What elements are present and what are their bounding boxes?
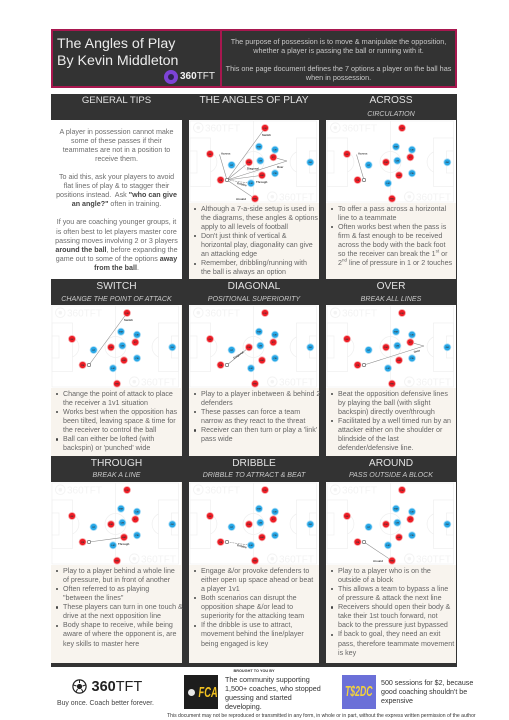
pitch diagram: through: 360TFT [141, 554, 176, 565]
pitch diagram: diagonal: 360TFT [279, 377, 314, 388]
text: through bullets: Often referred to as playing [63, 585, 149, 593]
pitch diagram: all angles: Around [236, 197, 246, 201]
panel: switch [51, 305, 182, 456]
heading: the angles of play: THE ANGLES OF PLAY [199, 95, 309, 106]
text: over bullets: by playing the ball (with slight [338, 399, 430, 407]
text: general tips: positions instead. Ask "who can give [56, 191, 177, 199]
pitch diagram: around: 360TFT [416, 554, 451, 565]
text: across bullets: 2nd line of pressure in 1 or 2 touches [338, 258, 452, 267]
text: around bullets: Receivers should open their body & [338, 603, 450, 611]
heading: over: OVER [377, 281, 405, 292]
text: switch bullets [56, 390, 177, 452]
text: general tips: To aid this, ask your players to avoid [59, 173, 174, 181]
pitch diagram: around: 360TFT [342, 485, 377, 496]
text: around bullets: This allows a team to bypass a line [338, 585, 448, 593]
subheading: dribble to attract and beat: DRIBBLE TO ATTRACT & BEAT [203, 470, 305, 478]
text: over bullets: Beat the opposition defensive lines [338, 390, 448, 398]
pitch diagram: all angles: Over [277, 165, 284, 169]
text: angles bullets: Don't just think of vertical & [201, 232, 287, 240]
pitch diagram: around [326, 482, 456, 565]
subheading: pass outside a block: PASS OUTSIDE A BLOCK [349, 470, 433, 478]
pitch diagram: switch: 360TFT [141, 377, 176, 388]
divider [220, 31, 222, 86]
text: diagonal bullets: These passes can force a team [201, 408, 300, 416]
text: general tips: around the ball, before expanding the [55, 246, 178, 254]
heading: diagonal: DIAGONAL [228, 281, 280, 292]
text: angles bullets: the diagrams, these angles & options [201, 214, 318, 222]
text: across bullets: line to a teammate [338, 214, 396, 222]
text: switch bullets: been tilted, leaving space & time for [63, 417, 176, 425]
text: through bullets: These players can turn in one touch & [63, 603, 183, 611]
panel: around [326, 482, 456, 663]
tagline: Buy once. Coach better forever. [57, 700, 154, 707]
pitch diagram: across: 360TFT [342, 123, 377, 134]
pitch diagram: switch: Switch [124, 318, 133, 322]
pitch diagram: across: Across [358, 152, 368, 156]
intro text: whether a player is passing the ball or running with it. [253, 46, 424, 55]
text: dribble bullets: being engaged is key [201, 640, 268, 648]
text: general tips: game out to some of the options away [56, 255, 177, 263]
pitch diagram: over: Over [413, 348, 421, 354]
logo: 360TFT [164, 70, 215, 84]
footer logo: 360TFT [57, 679, 154, 707]
text: T$2DC sessions [381, 679, 473, 705]
text: across bullets: so the receiver can break the 1st or [338, 249, 447, 258]
text: switch bullets: backspin) or 'punched' wide [63, 444, 150, 452]
text: diagonal bullets: pass wide [201, 435, 233, 443]
text: dribble bullets [194, 567, 314, 648]
pitch diagram: over [326, 305, 456, 388]
text: through bullets: aware of where the opponent is, are [63, 630, 176, 638]
text: FCA community: developing. [225, 702, 262, 711]
heading: dribble: DRIBBLE [232, 458, 276, 469]
pitch diagram: over: 360TFT [342, 308, 377, 319]
text: through bullets [56, 567, 183, 648]
pitch diagram: all angles: Across [221, 152, 231, 156]
text: FCA community: 1,500+ coaches, who stopped [225, 684, 321, 693]
text: around bullets: If back to goal, they need an exit [338, 630, 440, 638]
text: FCA community [225, 674, 321, 711]
text: angles bullets: Remember, dribbling/running with [201, 259, 307, 267]
pitch diagram: all angles: Switch [262, 133, 271, 137]
text: across bullets: across the body with the back foot [338, 241, 446, 249]
subheading: change the point of attack: CHANGE THE POINT OF ATTACK [61, 295, 172, 303]
text: over bullets [331, 390, 451, 452]
text: general tips: is often best to let players master core [56, 228, 177, 236]
subheading: break all lines: BREAK ALL LINES [361, 295, 421, 303]
text: across bullets: To offer a pass across a horizontal [338, 205, 446, 213]
intro text: The purpose of possession is to move & manipulate the opposition, [231, 36, 446, 46]
text: around bullets: take their 1st touch forward, not [338, 612, 438, 620]
logo: FCA [184, 675, 218, 709]
subheading: circulation: CIRCULATION [367, 110, 415, 118]
text: T$2DC sessions: expensive [381, 697, 413, 705]
pitch diagram: all angles: 360TFT [205, 123, 240, 134]
text: across bullets: firm & fast enough to be received [338, 232, 442, 240]
FCA wordmark: FCA [199, 684, 218, 701]
pitch diagram: across: 360TFT [416, 192, 451, 203]
panel: through [51, 482, 182, 663]
pitch diagram: through [51, 482, 181, 565]
text: across bullets: Often works best when the pass is [338, 223, 446, 231]
pitch diagram: all angles [189, 120, 319, 203]
heading: switch: SWITCH [96, 281, 137, 292]
text: diagonal bullets: narrow as they react to the threat [201, 417, 305, 425]
text: dribble bullets: Both scenarios can disrupt the [201, 594, 297, 602]
text: over bullets: blindside of the last [338, 435, 399, 443]
text: over bullets: attacker either on the shoulder or [338, 426, 442, 434]
main dark board [50, 94, 457, 666]
text: dribble bullets: Engage &/or provoke defenders to [201, 567, 309, 575]
panel: the angles of play [189, 120, 319, 279]
pitch diagram: switch [51, 305, 181, 388]
text: angles bullets [194, 205, 318, 276]
header banner [51, 29, 457, 88]
pitch diagram: all angles: Through [256, 180, 268, 184]
text: diagonal bullets [194, 390, 320, 443]
text: general tips: passing moves involving 2 or 3 players [55, 237, 178, 245]
text: through bullets: "between the lines" [63, 594, 123, 602]
text: around bullets: back to the pressure just bypassed [338, 621, 448, 629]
icon: football [188, 689, 195, 696]
pitch diagram: dribble: 360TFT [205, 485, 240, 496]
pitch diagram: all angles: 360TFT [279, 192, 314, 203]
pitch diagram: all angles: Diagonal [247, 166, 259, 170]
panel: general tips [51, 120, 182, 279]
pitch diagram: across [326, 120, 456, 203]
text: general tips: If you are coaching younger groups, it [57, 218, 176, 226]
brand wordmark: 360TFT [92, 679, 142, 695]
text: diagonal bullets: Play to a player inbetween & behind 2 [201, 390, 320, 398]
text: angles bullets: an attacking edge [201, 250, 257, 258]
text: through bullets: Play to a player behind a whole line [63, 567, 175, 575]
text: angles bullets: apply to all levels of football [201, 223, 288, 231]
text: around bullets: of pressure & attack the next line [338, 594, 442, 602]
text: through bullets: of pressure, but in front of another [63, 576, 170, 584]
text: through bullets: Body shape to receive, while being [63, 621, 173, 629]
intro text [226, 36, 452, 82]
panel: diagonal [189, 305, 319, 456]
text: dribble bullets: movement behind the line/player [201, 630, 304, 638]
pitch diagram: over: 360TFT [416, 377, 451, 388]
text: switch bullets: the receiver to control the ball [63, 426, 156, 434]
title: The Angles of Play [57, 36, 175, 52]
panel: dribble [189, 482, 319, 663]
text: general tips: from the ball. [94, 264, 139, 272]
text: general tips: some of these passes if their [71, 137, 162, 145]
logo: T$2DC [342, 675, 376, 709]
text: dribble bullets: opposition shape &/or lead to [201, 603, 293, 611]
pitch diagram: switch: 360TFT [67, 308, 102, 319]
text: switch bullets: the receiver a 1v1 situation [63, 399, 148, 407]
text: dribble bullets: superiority for the attacking team [201, 612, 304, 620]
text: general tips: A player in possession cannot make [60, 128, 173, 136]
heading: across: ACROSS [369, 95, 413, 106]
title: By Kevin Middleton [57, 52, 178, 68]
heading: general tips: GENERAL TIPS [82, 94, 151, 106]
text: over bullets: Facilitated by a well timed run by an [338, 417, 451, 425]
pitch diagram: diagonal: Diagonal [232, 350, 245, 360]
text: FCA community: The community supporting [225, 674, 310, 684]
text: over bullets: backspin) directly over/through [338, 408, 435, 416]
text: T$2DC sessions: 500 sessions for $2, because [381, 679, 473, 687]
text: T$2DC sessions: good coaching shouldn't be [381, 688, 467, 696]
text: angles bullets: Although a 7-a-side setup is used in [201, 205, 314, 213]
text: across bullets [331, 205, 452, 267]
text: diagonal bullets: Receiver can then turn or play a 'link' [201, 426, 317, 434]
subheading: break a line: BREAK A LINE [93, 470, 140, 478]
text: general tips [55, 128, 178, 272]
text: switch bullets: Works best when the opposition has [63, 408, 177, 416]
pitch diagram: dribble: 360TFT [279, 554, 314, 565]
text: dribble bullets: If the dribble is use to attract, [201, 621, 292, 629]
intro text: when in possession. [306, 73, 371, 82]
text: through bullets: key skills to master here [63, 640, 139, 648]
text: over bullets: defender/defensive line. [338, 444, 414, 452]
pitch diagram: diagonal: 360TFT [205, 308, 240, 319]
title [57, 36, 178, 68]
text: dribble bullets: a player 1v1 [201, 585, 240, 593]
disclaimer: This document may not be reproduced or transmitted in any form, in whole or in part, without the express written permission of the author [167, 713, 476, 719]
pitch diagram: through: 360TFT [67, 485, 102, 496]
text: dribble bullets: either open up space ahead or beat [201, 576, 313, 584]
text: around bullets: outside of a block [338, 576, 393, 584]
text: diagonal bullets: defenders [201, 399, 233, 407]
text: general tips: flat lines of play & to stagger their [64, 182, 169, 190]
logo: T$2DC: T$2DC [345, 683, 373, 700]
subheading: positional superiority: POSITIONAL SUPERIORITY [208, 295, 300, 303]
text: FCA community: guessing and started [225, 693, 292, 702]
text: through bullets: drive at the next opposition line [63, 612, 161, 620]
logo: 360TFT: 360TFT [180, 71, 215, 82]
text: around bullets [331, 567, 454, 657]
text: switch bullets: Change the point of attack to place [63, 390, 173, 398]
pitch diagram: dribble: Dribble [237, 543, 248, 549]
pitch diagram: through: Through [118, 542, 130, 546]
icon: football [72, 679, 87, 694]
footer label: brought to you by: BROUGHT TO YOU BY [234, 668, 274, 672]
panel: across [326, 120, 456, 279]
heading: around: AROUND [369, 458, 413, 469]
text: angles bullets: horizontal play, diagonality can give [201, 241, 313, 249]
text: around bullets: pass, therefore teammate movement [338, 640, 454, 648]
pitch diagram: dribble [189, 482, 319, 565]
text: general tips: teammates are not in a position to [63, 146, 170, 154]
text: around bullets: Play to a player who is on the [338, 567, 431, 575]
text: angles bullets: the ball is always an option [201, 268, 286, 276]
text: general tips: receive them. [95, 155, 138, 163]
pitch diagram: around: Around [373, 559, 383, 563]
intro text: This one page document defines the 7 options a player on the ball has [226, 64, 451, 73]
pitch diagram: all angles: Dribble [237, 181, 248, 187]
text: around bullets: is key [338, 649, 356, 657]
panel: over [326, 305, 456, 456]
heading: through: THROUGH [91, 458, 142, 469]
text: switch bullets: Ball can either be lofted (with [63, 435, 154, 443]
pitch diagram: diagonal [189, 305, 319, 388]
text: general tips: an angle?" often in training. [72, 200, 161, 208]
